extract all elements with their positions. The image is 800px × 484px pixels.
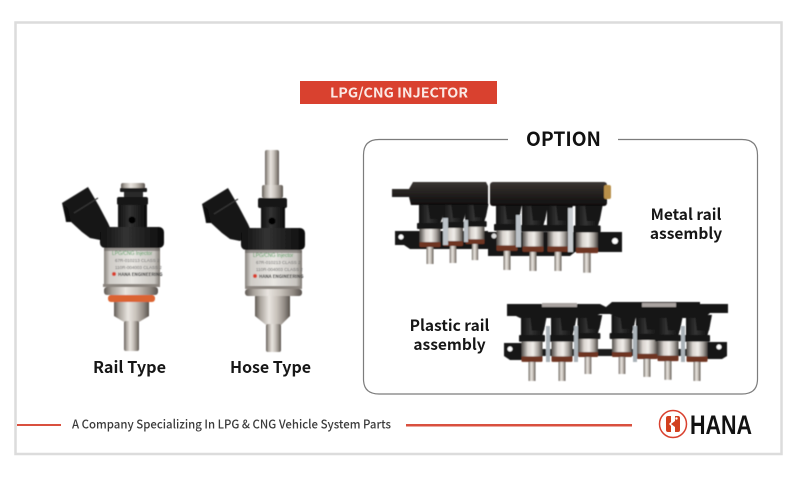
rail left [392, 182, 488, 205]
product: plastic rail assembly [504, 302, 728, 381]
logo: HANA: HANA [690, 410, 752, 440]
injectors [519, 315, 547, 381]
metal rail label: Metal rail [651, 203, 722, 225]
metal rail label: assembly [650, 222, 722, 244]
product label: HANA ENGINEERING [118, 272, 162, 278]
product label: 110R-004003 CLASS 2 [115, 265, 162, 270]
injectors [417, 205, 445, 264]
footer left rule [17, 424, 61, 426]
product label [112, 251, 162, 278]
footer tagline: A Company Specializing In LPG & CNG Vehicle System Parts [72, 416, 391, 432]
product label: LPG/CNG Injector [112, 251, 153, 257]
product label: HANA ENGINEERING [259, 274, 303, 280]
icon: connector [202, 188, 252, 241]
icon: connector [62, 187, 112, 240]
icon: logo mark [660, 410, 686, 438]
rail right [490, 182, 607, 206]
footer right rule [406, 424, 632, 426]
clips [546, 326, 550, 362]
product label [253, 253, 303, 280]
product: rail type injector [62, 183, 164, 351]
clips [443, 218, 448, 245]
rail [507, 302, 728, 318]
plastic rail label: Plastic rail [410, 314, 489, 336]
brackets [504, 343, 530, 360]
title banner: LPG/CNG INJECTOR [330, 82, 468, 102]
plastic rail label: assembly [413, 333, 486, 355]
logo: HANA [660, 410, 752, 440]
product label: LPG/CNG Injector [253, 253, 294, 259]
product: metal rail assembly [392, 182, 622, 273]
product: hose type injector [202, 150, 305, 352]
brackets [395, 231, 488, 249]
product label: 67R-010213 CLASS 2 [256, 260, 301, 265]
hose type label: Hose Type [230, 354, 311, 378]
title banner [300, 81, 497, 104]
rail type label: Rail Type [93, 354, 166, 378]
panel: option [364, 123, 758, 394]
option heading: OPTION [526, 123, 601, 152]
product label: 110R-004003 CLASS 2 [256, 267, 303, 272]
product label: 67R-010213 CLASS 2 [115, 258, 160, 263]
